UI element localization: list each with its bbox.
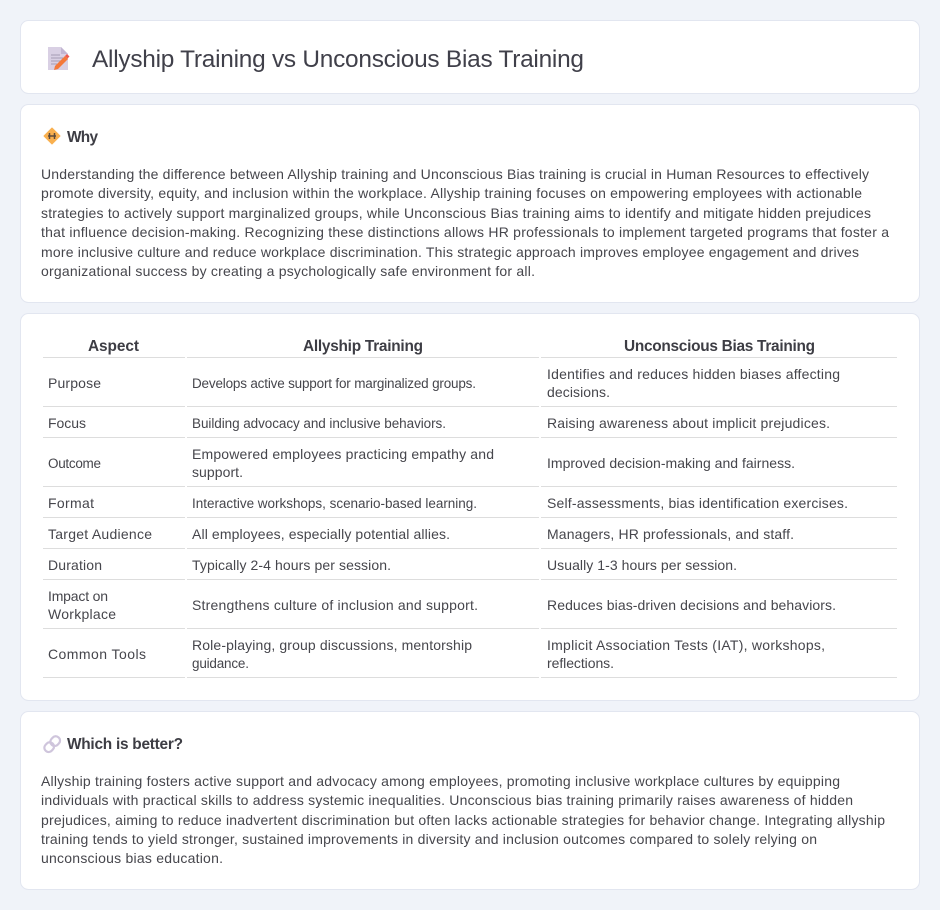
row: target audience: Target Audience [48,526,152,542]
text block: why body [41,166,889,279]
row: common tools: guidance. [192,656,249,671]
row: target audience: Managers, HR professionals, and staff. [547,526,794,542]
row: focus: Focus [48,415,86,431]
text block: which is better body: Allyship training fosters active support and advocacy among employees, promoting inclusive workplace cultures by equipping [41,773,840,789]
row: target audience: All employees, especially potential allies. [192,526,450,542]
table header: Aspect [88,338,139,355]
row: duration [48,557,737,573]
heading: which is better: Which is better? [67,736,183,753]
row: purpose: decisions. [547,384,610,400]
row: purpose [48,366,840,400]
text block: why body: Understanding the difference between Allyship training and Unconscious Bias training is crucial in Human Resources to effectively [41,166,869,182]
row: impact on workplace [48,588,836,622]
row: focus: Raising awareness about implicit prejudices. [547,415,830,431]
panel: comparison table [20,314,920,700]
row: format [48,495,848,511]
table header: Unconscious Bias Training [624,338,815,355]
row: duration: Duration [48,557,102,573]
text block: why body: promote diversity, equity, and inclusion within the workplace. Allyship training focuses on empowering employees with actionable [41,185,862,201]
heading: why: Why [67,129,98,146]
text block: which is better body [41,773,885,866]
row: common tools: Role-playing, group discussions, mentorship [192,637,472,653]
icon: chain link [43,735,62,754]
row: format: Format [48,495,94,511]
row: common tools [48,637,825,671]
row: purpose: Purpose [48,375,101,391]
row: outcome [48,446,795,480]
row: impact on workplace: Reduces bias-driven decisions and behaviors. [547,597,836,613]
row: focus: Building advocacy and inclusive behaviors. [192,416,446,431]
row: impact on workplace: Workplace [48,606,116,622]
row: target audience [48,526,794,542]
row: common tools: Implicit Association Tests (IAT), workshops, [547,637,825,653]
text block: why body: organizational success by creating a psychologically safe environment for all. [41,263,535,279]
panel: why [20,104,920,302]
title: Allyship Training vs Unconscious Bias Training [92,46,584,73]
row: outcome: support. [192,464,243,480]
row: common tools: Common Tools [48,646,146,662]
row: format: Interactive workshops, scenario-based learning. [192,496,477,511]
panel: title header [20,20,920,94]
text block: why body: more inclusive culture and reduce workplace discrimination. This strategic approach improves employee engagement and drives [41,244,859,260]
text block: which is better body: prejudices, aiming to reduce inadvertent discrimination but often lacks actionable strategies for behavior change. Integrating allyship [41,812,885,828]
row: duration: Usually 1-3 hours per session. [547,557,737,573]
row: outcome: Empowered employees practicing empathy and [192,446,494,462]
text block: which is better body: individuals with practical skills to address systemic inequalities. Unconscious bias training primarily raises awareness of hidden [41,792,853,808]
row: impact on workplace: Strengthens culture of inclusion and support. [192,597,478,613]
row: duration: Typically 2-4 hours per session. [192,557,391,573]
table header: Allyship Training [303,338,423,355]
row: outcome: Improved decision-making and fairness. [547,455,795,471]
table header [88,338,815,355]
row: purpose: Develops active support for marginalized groups. [192,376,476,391]
row: common tools: reflections. [547,655,614,671]
text block: why body: that influence decision-making. Recognizing these distinctions allows HR professionals to implement targeted programs that foster a [41,224,889,240]
icon: document with pencil [48,47,70,70]
row: outcome: Outcome [48,456,101,471]
row: format: Self-assessments, bias identification exercises. [547,495,848,511]
panel: which is better [20,712,920,890]
row: focus [48,415,830,431]
row: purpose: Identifies and reduces hidden biases affecting [547,366,840,382]
text block: which is better body: training tends to yield stronger, sustained improvements in diversity and inclusion outcomes compared to solely relying on [41,831,817,847]
row: impact on workplace: Impact on [48,588,108,604]
text block: which is better body: unconscious bias education. [41,850,223,866]
text block: why body: strategies to actively support marginalized groups, while Unconscious Bias training aims to identify and mitigate hidden prejudices [41,205,871,221]
icon: orange diamond sign [44,128,60,144]
